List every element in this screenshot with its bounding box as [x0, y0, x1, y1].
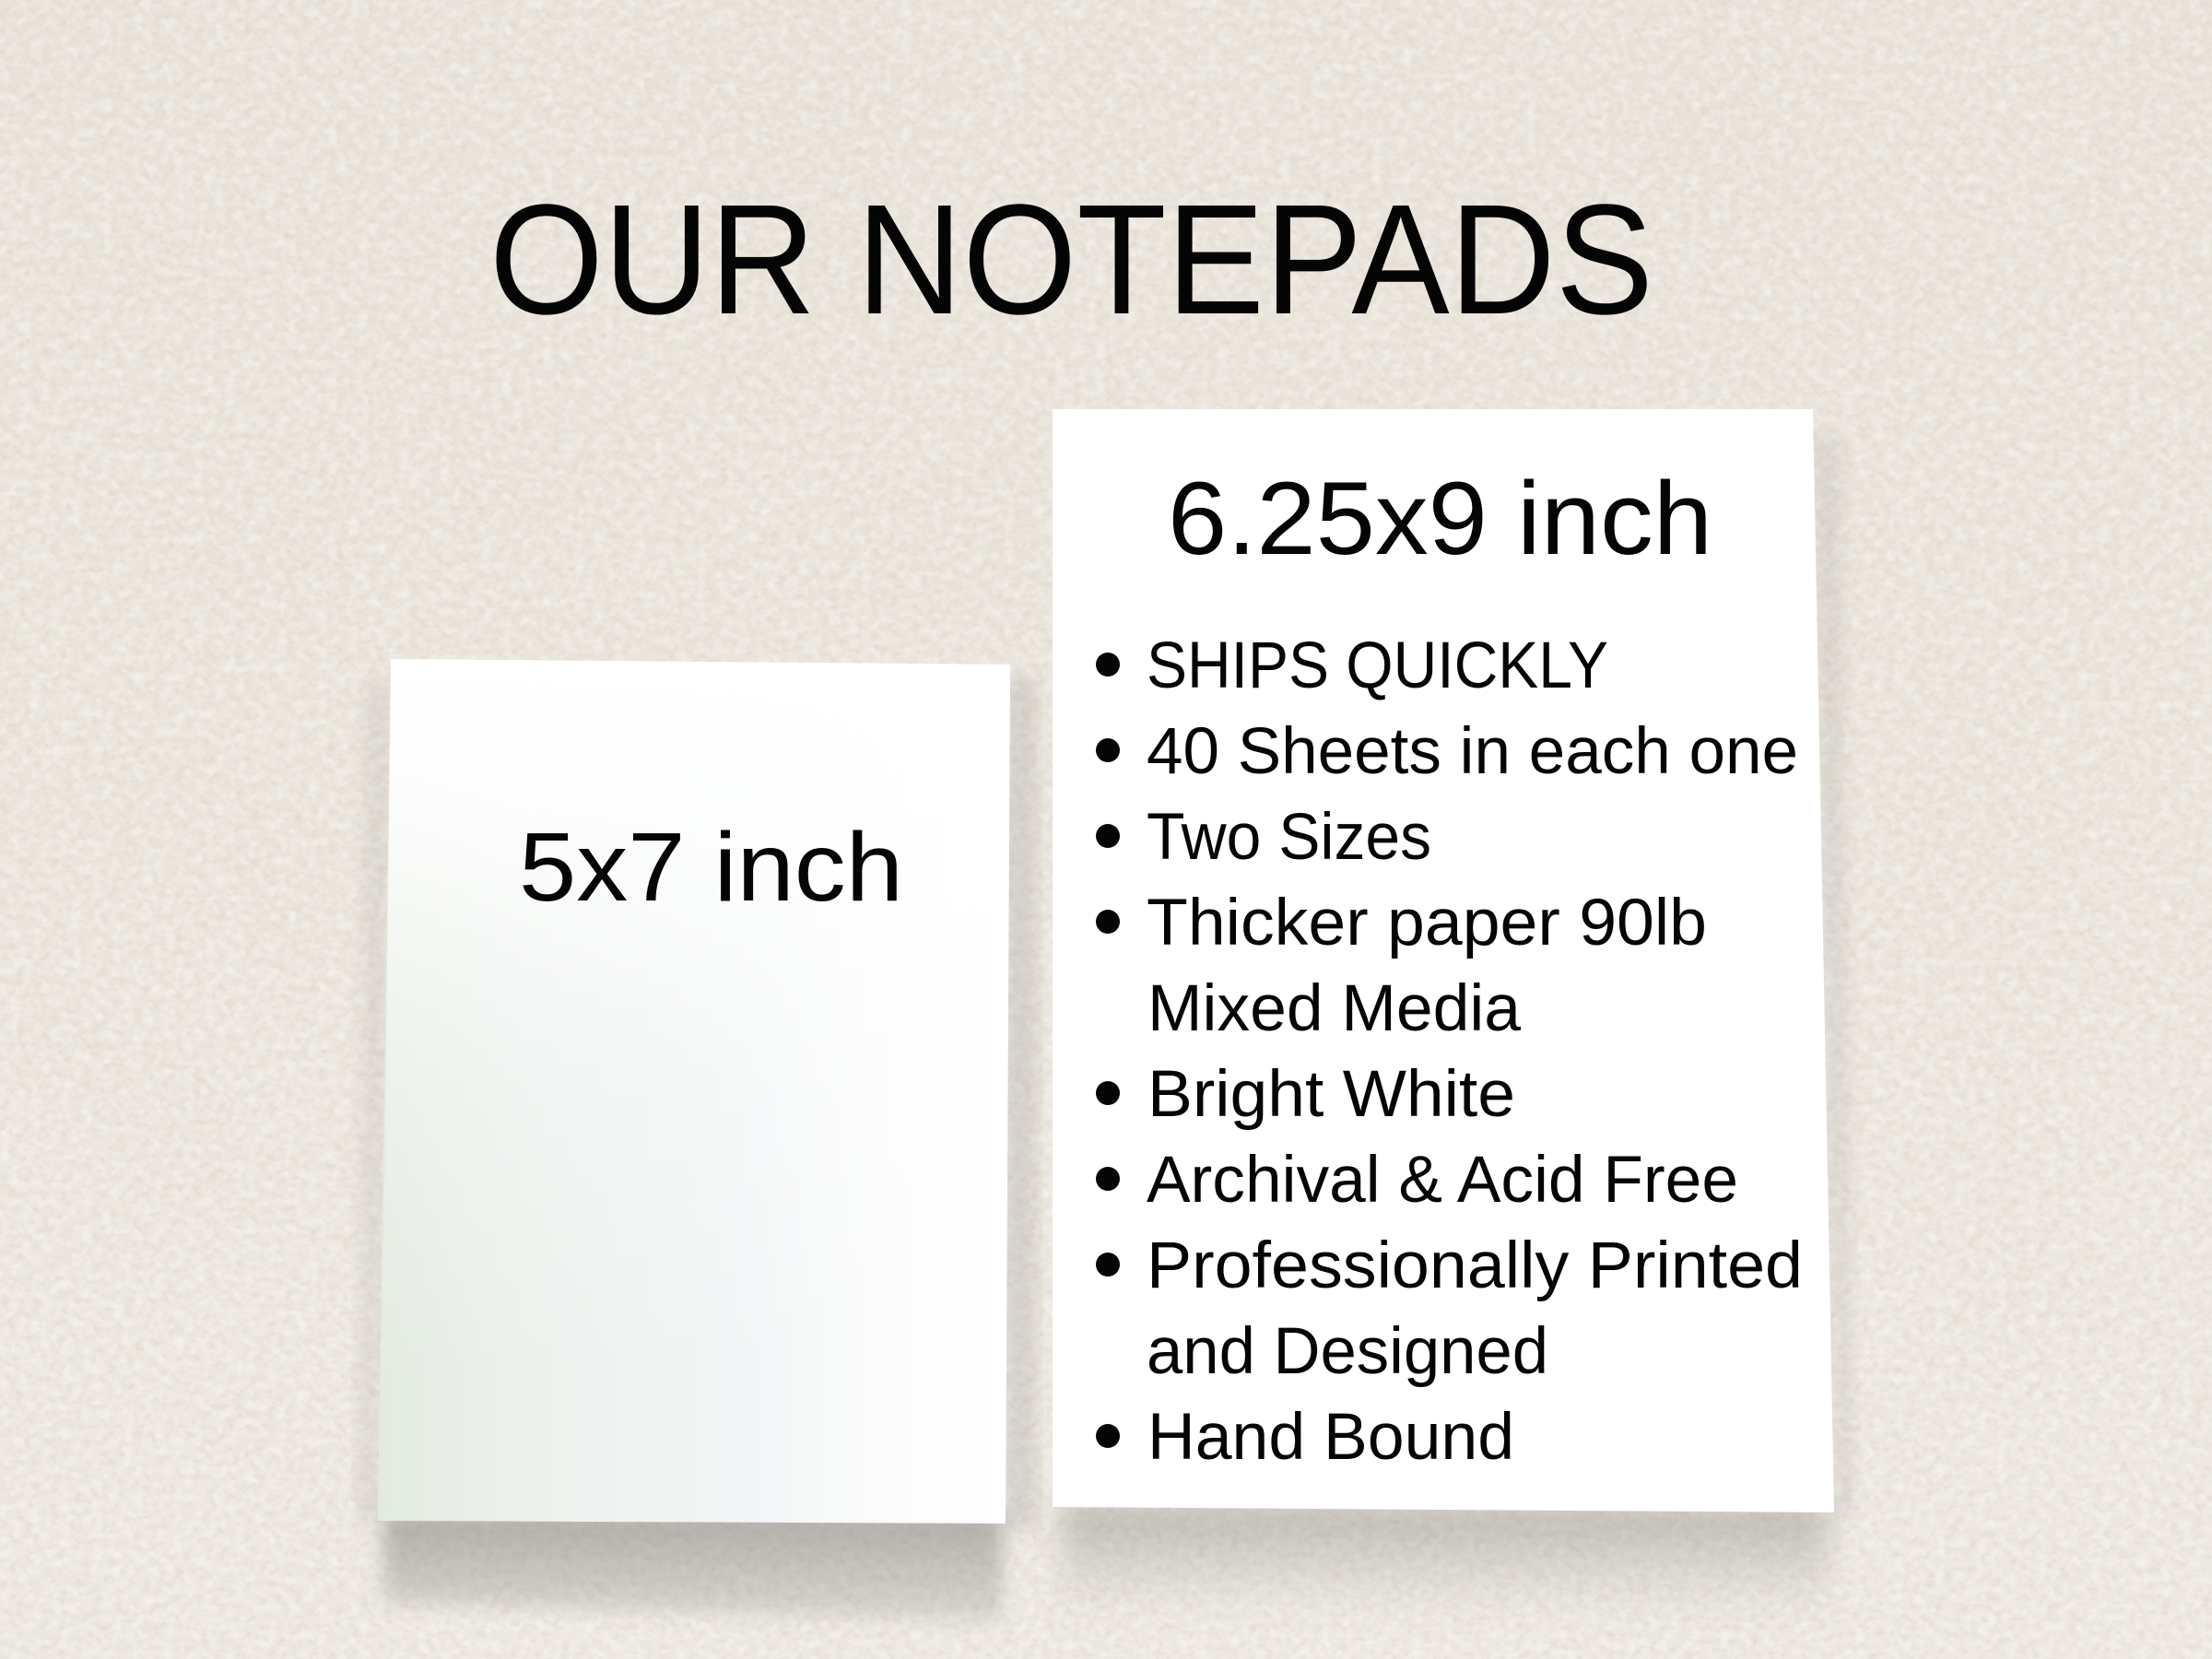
- bullet: archival: Archival & Acid Free: [1147, 1144, 1738, 1217]
- title: OUR NOTEPADS: [489, 172, 1653, 347]
- bullet: two sizes: Two Sizes: [1147, 801, 1431, 874]
- pad top highlight: [382, 659, 1010, 1382]
- bullet: ships quickly: SHIPS QUICKLY: [1147, 629, 1608, 702]
- bullet: professionally printed: [1096, 1230, 1803, 1388]
- shadow: large notepad: [1060, 433, 1853, 1618]
- shadow: small notepad: [358, 677, 1037, 1622]
- panel: 5x7 notepad: [378, 659, 1010, 1524]
- bullet: professionally printed: Professionally Printed: [1147, 1230, 1803, 1302]
- bullet: thicker paper: [1096, 887, 1707, 1045]
- panel: 6.25x9 notepad: [1053, 409, 1834, 1512]
- bullet: bright white: Bright White: [1147, 1058, 1515, 1131]
- bullet: thicker paper: Mixed Media: [1147, 972, 1522, 1045]
- feature list: [1096, 629, 1803, 1474]
- heading: 5x7 inch: 5x7 inch: [519, 813, 903, 922]
- bullet: 40 sheets: 40 Sheets in each one: [1147, 715, 1798, 788]
- heading: 6.25x9 inch: 6.25x9 inch: [1168, 461, 1712, 576]
- bullet: hand bound: Hand Bound: [1147, 1401, 1514, 1474]
- bullet: professionally printed: and Designed: [1147, 1315, 1548, 1388]
- bullet: thicker paper: Thicker paper 90lb: [1147, 887, 1707, 959]
